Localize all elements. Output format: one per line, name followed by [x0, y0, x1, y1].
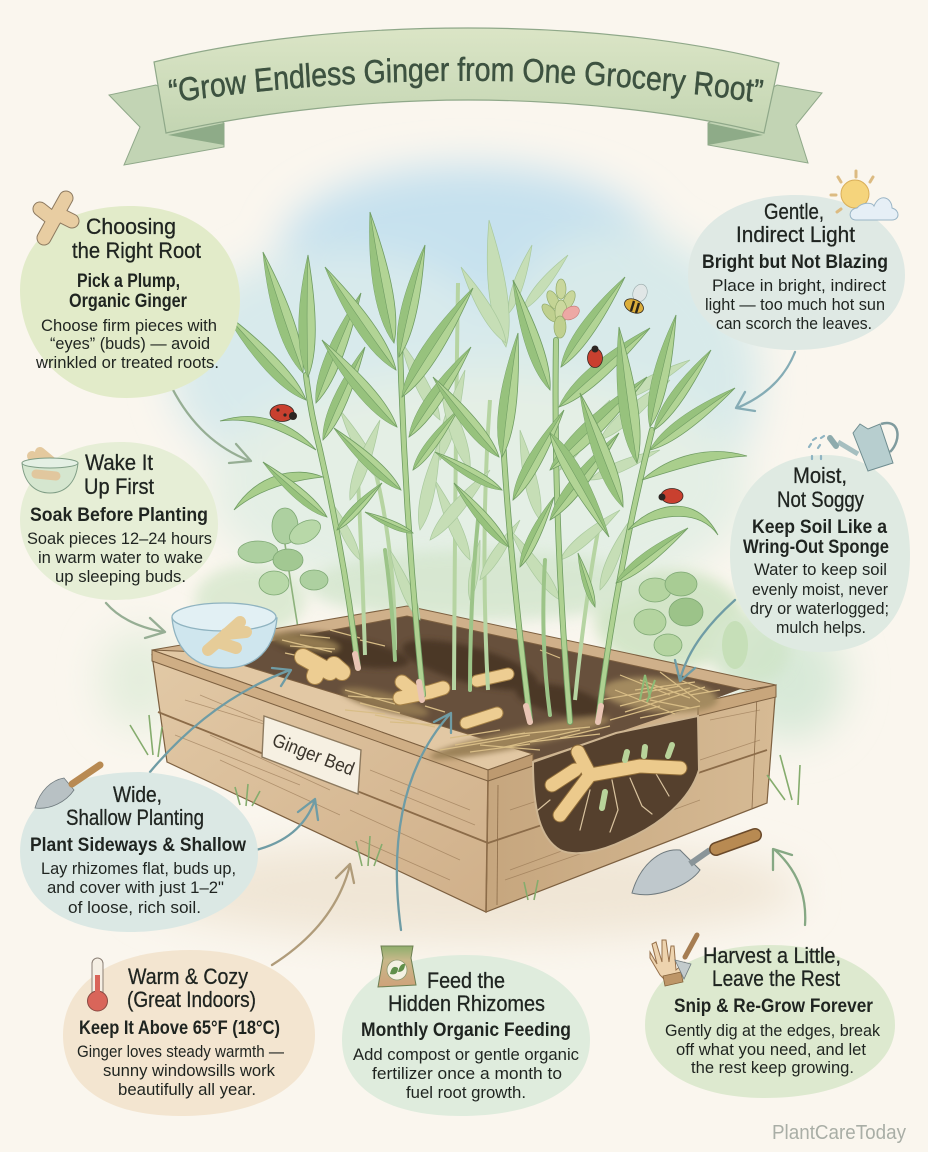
- panel: gentle indirect light: [688, 171, 905, 350]
- harvest: body: the rest keep growing.: [691, 1058, 854, 1077]
- banner: right tail: [708, 85, 822, 163]
- warm: blob: [63, 950, 315, 1116]
- moist: subheading: [743, 517, 889, 558]
- moist: body: evenly moist, never: [752, 580, 888, 599]
- background: garden foliage: [195, 550, 790, 685]
- bed: board lines: [158, 695, 767, 912]
- bed: soil surface: [190, 611, 746, 760]
- wake: body: in warm water to wake: [38, 548, 203, 567]
- watermark: PlantCareToday: [772, 1122, 906, 1144]
- cutaway: rhizome outline: [552, 752, 680, 815]
- feed: body: Add compost or gentle organic: [353, 1045, 579, 1064]
- wide: blob: [20, 772, 258, 932]
- warm: heading: [127, 964, 256, 1012]
- gentle: body: can scorch the leaves.: [716, 314, 872, 333]
- banner: title text: “Grow Endless Ginger from One Grocery Root”: [168, 56, 764, 102]
- icon: watering can: [809, 423, 897, 471]
- arrow: planting to ginger: [150, 668, 291, 772]
- bed: right face: [486, 685, 776, 912]
- wide: subheading: Plant Sideways & Shallow: [30, 835, 246, 856]
- moist: body: [750, 560, 889, 637]
- arrow: soak to bowl: [106, 603, 165, 638]
- harvest: heading: Leave the Rest: [712, 966, 841, 991]
- ginger plant: background stems and leaves: [326, 219, 693, 700]
- harvest: body: [665, 1021, 880, 1077]
- bed: cutaway soil: [533, 716, 699, 853]
- ginger plant: front stems: [306, 340, 652, 722]
- wake: heading: Wake It: [85, 450, 154, 475]
- ladybug left: [270, 404, 297, 422]
- choosing: heading: [72, 214, 202, 263]
- harvest: heading: Harvest a Little,: [703, 943, 841, 968]
- feed: heading: Feed the: [427, 968, 505, 993]
- bed: sign Ginger Bed: Ginger Bed: [269, 730, 357, 780]
- bed: soil texture patches: [269, 624, 719, 766]
- choosing: body: “eyes” (buds) — avoid: [50, 334, 210, 353]
- wake: body: up sleeping buds.: [55, 567, 186, 586]
- moist: blob: [730, 455, 910, 652]
- moist: body: dry or waterlogged;: [750, 599, 889, 618]
- feed: blob: [342, 955, 590, 1116]
- panel: wake it up first: [20, 442, 218, 600]
- panel: choosing the right root: [20, 198, 240, 398]
- harvest: heading: [703, 943, 841, 991]
- cutaway: roots: [538, 770, 669, 832]
- arrow: moist to mulch: [675, 600, 735, 681]
- warm: heading: (Great Indoors): [127, 987, 256, 1012]
- moist: heading: Not Soggy: [777, 487, 865, 512]
- wide: body: and cover with just 1–2": [47, 878, 224, 897]
- arrows: [106, 352, 805, 965]
- garden trowel right: [632, 835, 755, 895]
- choosing: body: wrinkled or treated roots.: [35, 353, 219, 372]
- background: sky wash: [100, 165, 845, 740]
- wide: body: of loose, rich soil.: [68, 898, 201, 917]
- wake: subheading: Soak Before Planting: [30, 505, 208, 526]
- moist: subheading: Wring-Out Sponge: [743, 537, 889, 558]
- choosing: heading: the Right Root: [72, 238, 202, 263]
- raised garden bed: [152, 606, 776, 912]
- wake: heading: Up First: [84, 474, 155, 499]
- warm: body: sunny windowsills work: [103, 1061, 275, 1080]
- choosing: body: [35, 316, 219, 372]
- gentle: body: Place in bright, indirect: [712, 276, 886, 295]
- arrow: feed to rhizomes: [397, 713, 451, 930]
- bed: left front face: [152, 655, 488, 912]
- feed: heading: Hidden Rhizomes: [388, 991, 545, 1016]
- bee: [622, 282, 650, 316]
- wake: heading: [84, 450, 155, 499]
- banner: fold shadows: [168, 123, 763, 145]
- bed: back rim: [152, 606, 776, 690]
- wide: heading: Wide,: [113, 782, 162, 807]
- arrow: harvest to trowel: [773, 849, 805, 925]
- rhizome in cutaway: [538, 745, 680, 832]
- warm: body: [77, 1042, 284, 1099]
- moist: body: Water to keep soil: [754, 560, 887, 579]
- ladybug upper: [588, 346, 602, 368]
- moist: body: mulch helps.: [776, 618, 866, 637]
- icon: fertilizer bag: [378, 946, 416, 987]
- icon: sun and cloud: [831, 171, 898, 220]
- ginger flower: [539, 279, 582, 338]
- choosing: subheading: [69, 271, 188, 312]
- wide: heading: Shallow Planting: [66, 805, 204, 830]
- arrow: choosing to plant: [172, 388, 251, 463]
- feed: body: [353, 1045, 579, 1102]
- ladybug right: [658, 488, 683, 504]
- herb plant left: [238, 508, 328, 640]
- icon: soaking bowl: [22, 452, 78, 493]
- harvest: body: Gently dig at the edges, break: [665, 1021, 880, 1040]
- gentle: heading: [736, 199, 856, 247]
- harvest: blob: [645, 945, 895, 1098]
- banner: left tail: [109, 85, 224, 165]
- icon: hand trowel: [35, 765, 100, 808]
- arrow: planting to bed: [247, 799, 318, 852]
- herb plant right: [634, 572, 748, 669]
- icon: gloves and trowel: [650, 935, 697, 986]
- moist: heading: [777, 463, 865, 512]
- gentle: heading: Gentle,: [764, 199, 824, 224]
- bed: mulch straw: [282, 630, 720, 752]
- wake: body: [27, 529, 212, 586]
- feed: body: fuel root growth.: [406, 1083, 526, 1102]
- bed: sign Ginger Bed: [262, 716, 361, 794]
- icon: ginger root: [40, 198, 72, 238]
- feed: body: fertilizer once a month to: [372, 1064, 562, 1083]
- choosing: subheading: Pick a Plump,: [77, 271, 180, 292]
- panel: harvest a little: [645, 935, 895, 1098]
- bed: front rim: [152, 650, 533, 770]
- warm: subheading: Keep It Above 65°F (18°C): [79, 1018, 280, 1039]
- gentle: body: [705, 276, 886, 333]
- harvest: subheading: Snip & Re-Grow Forever: [674, 996, 874, 1017]
- surface ginger pieces: [303, 657, 508, 723]
- bed: small sprout: [640, 675, 655, 702]
- wide: body: [41, 859, 236, 917]
- panel: wide shallow planting: [20, 765, 258, 932]
- arrow: light to leaves: [736, 352, 795, 411]
- choosing: blob: [20, 206, 240, 398]
- herb background wash: [140, 840, 800, 940]
- harvest: body: off what you need, and let: [676, 1040, 866, 1059]
- warm: heading: Warm & Cozy: [128, 964, 249, 989]
- grass tufts: [130, 715, 800, 900]
- panel: moist not soggy: [730, 423, 910, 652]
- wake: body: Soak pieces 12–24 hours: [27, 529, 212, 548]
- moist: subheading: Keep Soil Like a: [752, 517, 887, 538]
- choosing: body: Choose firm pieces with: [41, 316, 217, 335]
- wide: body: Lay rhizomes flat, buds up,: [41, 859, 236, 878]
- gentle: blob: [688, 195, 905, 350]
- icon: thermometer: [88, 958, 108, 1011]
- panel: warm and cozy: [63, 950, 315, 1116]
- warm: body: Ginger loves steady warmth —: [77, 1042, 284, 1061]
- choosing: heading: Choosing: [86, 214, 176, 239]
- warm: body: beautifully all year.: [118, 1080, 256, 1099]
- cutaway: rhizome body: [552, 752, 680, 815]
- moist: heading: Moist,: [793, 463, 847, 488]
- wake: blob: [20, 442, 218, 600]
- choosing: subheading: Organic Ginger: [69, 291, 188, 312]
- gentle: subheading: Bright but Not Blazing: [702, 252, 888, 273]
- title banner: [108, 27, 823, 166]
- arrow: warm to bed: [272, 864, 354, 965]
- banner: main ribbon: [154, 28, 779, 133]
- wide: heading: [66, 782, 204, 830]
- gentle: body: light — too much hot sun: [705, 295, 885, 314]
- cutaway: buds: [602, 745, 672, 808]
- feed: heading: [388, 968, 545, 1016]
- feed: subheading: Monthly Organic Feeding: [361, 1020, 571, 1041]
- gentle: heading: Indirect Light: [736, 222, 856, 247]
- ginger plant: front leaves: [218, 211, 747, 608]
- panel: feed the hidden rhizomes: [342, 946, 590, 1116]
- glass bowl with ginger: [172, 603, 277, 668]
